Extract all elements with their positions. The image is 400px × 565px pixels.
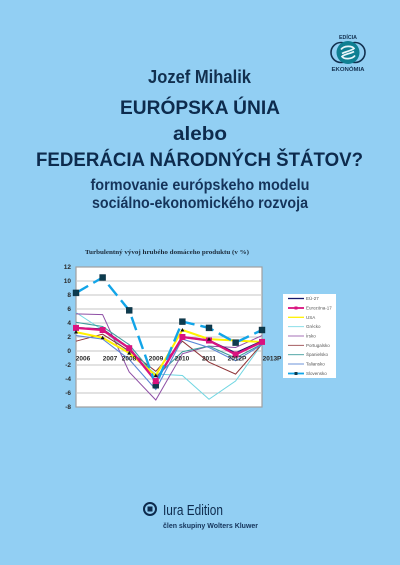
y axis labels: -8 [65, 404, 71, 411]
legend: Portugalsko [306, 343, 330, 348]
year labels: 2012P [228, 356, 247, 362]
y axis labels: 6 [67, 306, 71, 313]
year labels: 2009 [149, 356, 164, 362]
year labels: 2013P [263, 356, 282, 362]
legend: USA [306, 315, 315, 320]
legend: Španielsko [306, 351, 329, 357]
title: alebo [173, 124, 227, 145]
year labels: 2010 [175, 356, 190, 362]
icon: Iura Edition logo [144, 503, 156, 515]
chart title: Turbulentný vývoj hrubého domáceho produktu (v %) [85, 249, 249, 256]
series: Grécko [76, 312, 262, 399]
subtitle [90, 177, 310, 212]
year labels [76, 356, 282, 362]
series: Írsko [76, 314, 262, 400]
series: Eurozóna-17 [76, 328, 262, 381]
legend: Slovensko [306, 371, 327, 376]
year labels: 2006 [76, 356, 91, 362]
legend: EÚ-27 [306, 295, 319, 301]
title [36, 97, 363, 171]
year labels: 2011 [202, 356, 216, 362]
title: EURÓPSKA ÚNIA [120, 97, 280, 119]
legend: Eurozóna-17 [306, 306, 332, 310]
y axis labels: 8 [67, 292, 71, 299]
series: Slovensko [76, 278, 262, 385]
plot area [76, 267, 262, 407]
subtitle: sociálno-ekonomického rozvoja [92, 195, 308, 212]
icon: Edícia Ekonómia logo: EKONÓMIA [332, 65, 365, 73]
series: EU-27 [76, 328, 262, 381]
series: Portugalsko [76, 334, 262, 374]
series: Taliansko [76, 336, 262, 390]
author: Jozef Mihalik [148, 67, 252, 87]
subtitle: formovanie európskeho modelu [90, 177, 310, 194]
legend [283, 294, 336, 378]
series lines [76, 278, 262, 400]
series: Španielsko [76, 322, 262, 377]
title: FEDERÁCIA NÁRODNÝCH ŠTÁTOV? [36, 149, 363, 171]
y axis labels: 10 [64, 278, 71, 285]
legend: Taliansko [306, 362, 325, 366]
y axis labels: -6 [65, 390, 71, 397]
series markers [73, 274, 265, 388]
y axis labels [64, 264, 71, 411]
y axis labels: -4 [65, 376, 71, 383]
publisher note: člen skupiny Wolters Kluwer [163, 523, 258, 530]
y axis labels: 4 [67, 320, 71, 327]
y axis labels: 0 [67, 348, 71, 355]
y axis labels: 2 [67, 334, 71, 341]
y axis labels: -2 [65, 362, 71, 369]
icon: Edícia Ekonómia logo [331, 33, 365, 73]
series: USA [76, 330, 262, 376]
y axis labels: 12 [64, 264, 71, 271]
icon: Edícia Ekonómia logo: EDÍCIA [339, 33, 357, 41]
year labels: 2007 [103, 356, 118, 362]
legend: Írsko [306, 332, 316, 338]
publisher name: Iura Edition [163, 502, 223, 519]
year labels: 2008 [122, 356, 137, 362]
line chart: GDP development [64, 249, 336, 411]
legend: Grécko [306, 324, 321, 329]
